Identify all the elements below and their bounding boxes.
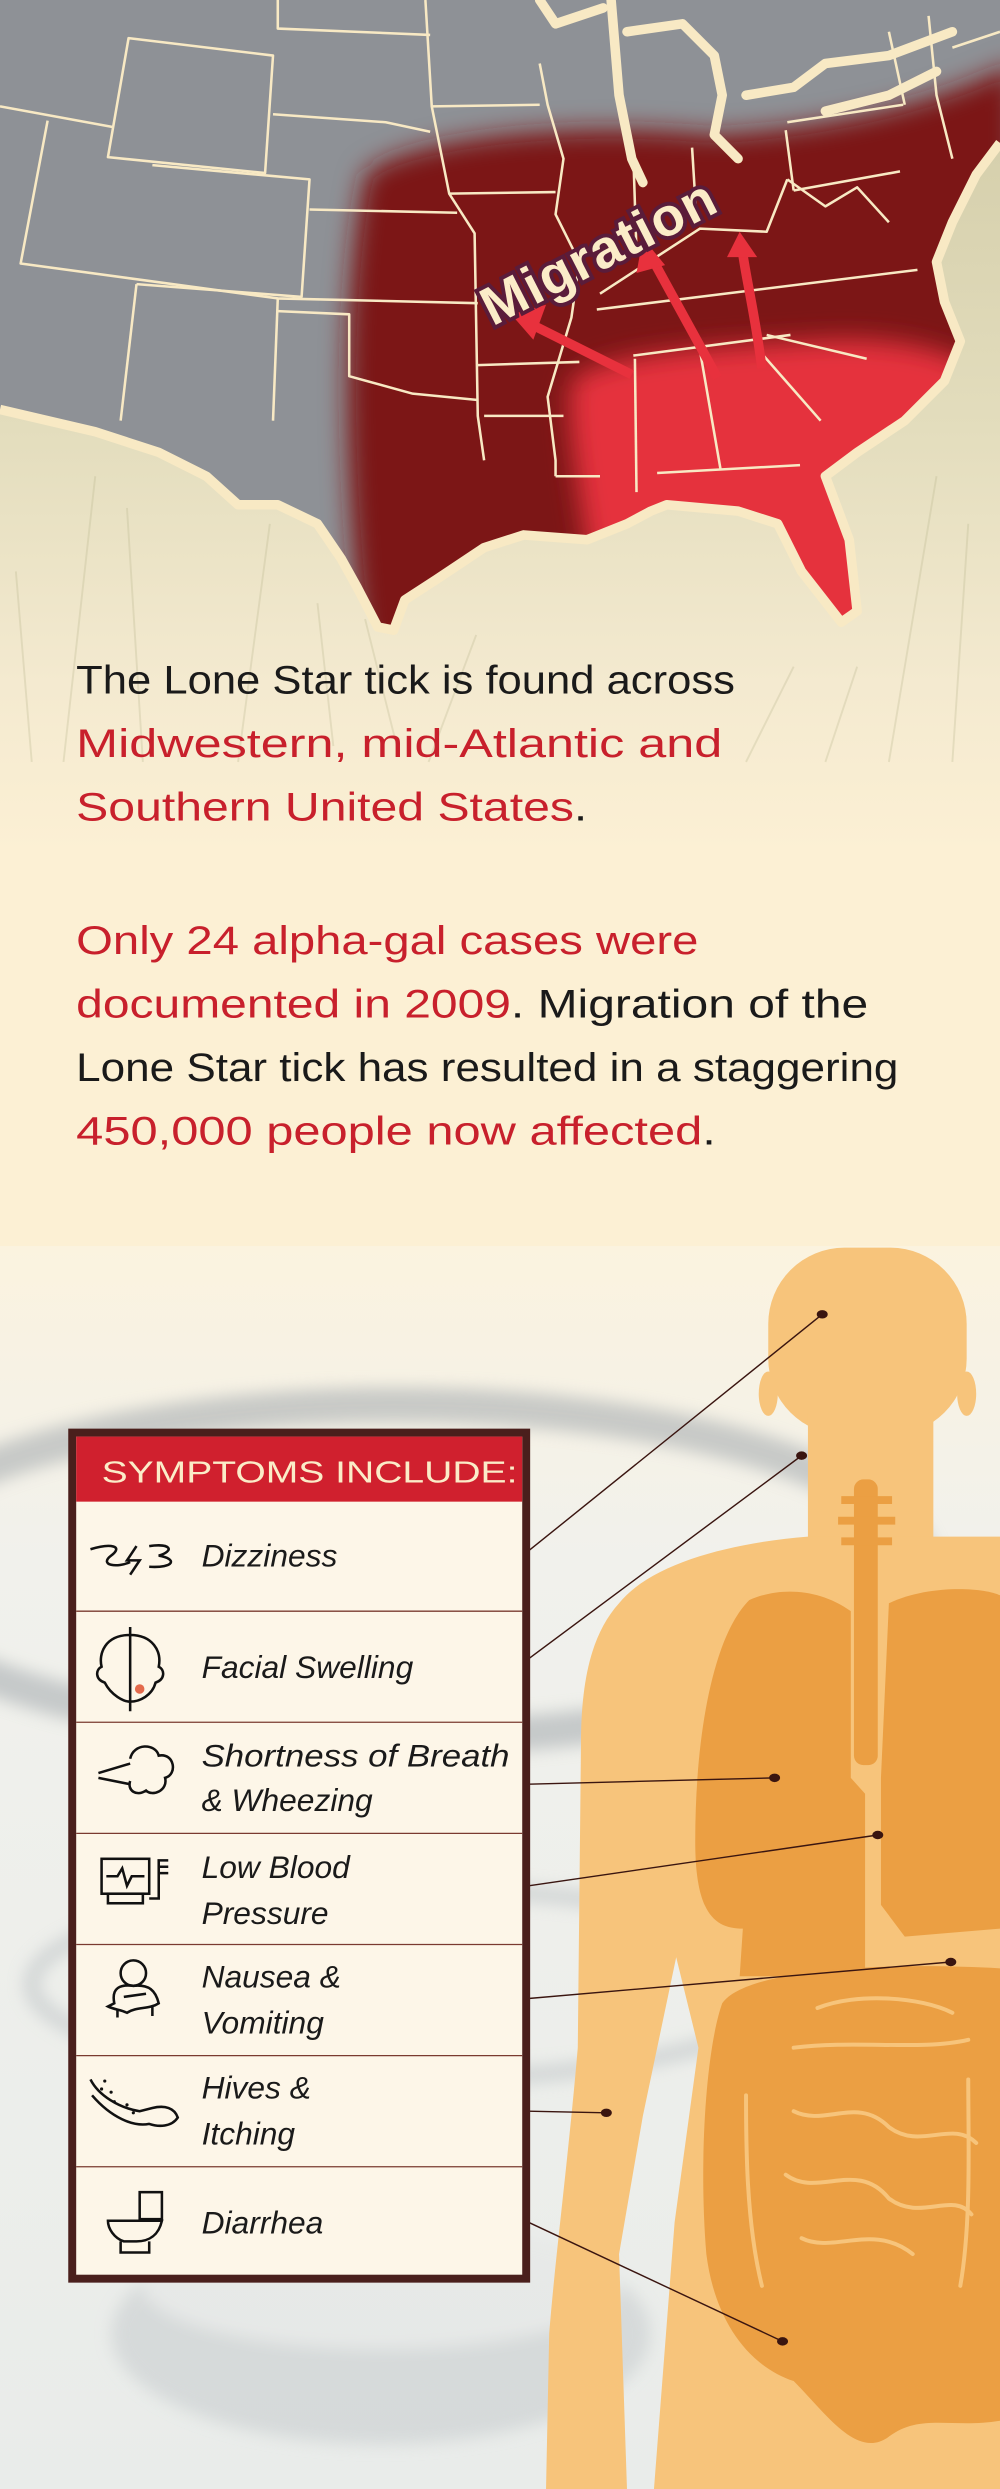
- text block: range: [76, 659, 735, 830]
- icon: diarrhea: [108, 2192, 162, 2252]
- text block: cases: Lone Star tick has resulted in a staggering: [76, 1046, 898, 1090]
- great lakes: [540, 0, 952, 183]
- panel: symptoms: [68, 1429, 530, 2283]
- labels: Nausea &: [202, 1958, 341, 1994]
- text block: range: Midwestern, mid-Atlantic and: [76, 722, 722, 766]
- labels: Itching: [202, 2116, 295, 2152]
- icon: shortness of breath: [98, 1746, 173, 1793]
- text block: cases: Only 24 alpha-gal cases were: [76, 919, 698, 963]
- labels: & Wheezing: [202, 1782, 373, 1818]
- header: symptoms include: SYMPTOMS INCLUDE:: [102, 1457, 517, 1490]
- icon: hives: [90, 2079, 178, 2126]
- pointer lines: [529, 1311, 956, 2345]
- map: US with tick range: [0, 0, 1000, 667]
- labels: Diarrhea: [202, 2204, 323, 2240]
- labels: Shortness of Breath: [202, 1738, 510, 1774]
- arrows: migration: [511, 232, 762, 378]
- text block: cases: [76, 919, 898, 1153]
- background: grass photo area: [0, 0, 1000, 857]
- labels: Pressure: [202, 1895, 329, 1931]
- body silhouette: [546, 1248, 1000, 2489]
- labels: Hives &: [202, 2070, 311, 2106]
- text block: cases: 450,000 people now affected .: [76, 1109, 716, 1153]
- labels: Vomiting: [202, 2004, 324, 2040]
- background: cream text area: [0, 849, 1000, 1246]
- icon: facial swelling: [97, 1627, 163, 1711]
- labels: [202, 1538, 510, 2240]
- text block: cases: documented in 2009 . Migration of the: [76, 983, 868, 1027]
- label: Migration: Migration: [471, 167, 727, 337]
- state lines: [0, 0, 1000, 492]
- header: symptoms include: [76, 1437, 522, 1502]
- text block: range: The Lone Star tick is found across: [76, 659, 735, 703]
- labels: Facial Swelling: [202, 1649, 414, 1685]
- background: lower stethoscope area: [0, 1246, 1000, 2489]
- icon: low blood pressure: [102, 1859, 168, 1903]
- icon: nausea: [108, 1960, 159, 2018]
- organs: [695, 1479, 1000, 2443]
- icon: dizziness: [90, 1545, 171, 1575]
- text block: range: Southern United States .: [76, 786, 587, 830]
- labels: Dizziness: [202, 1538, 338, 1574]
- labels: Low Blood: [202, 1849, 351, 1885]
